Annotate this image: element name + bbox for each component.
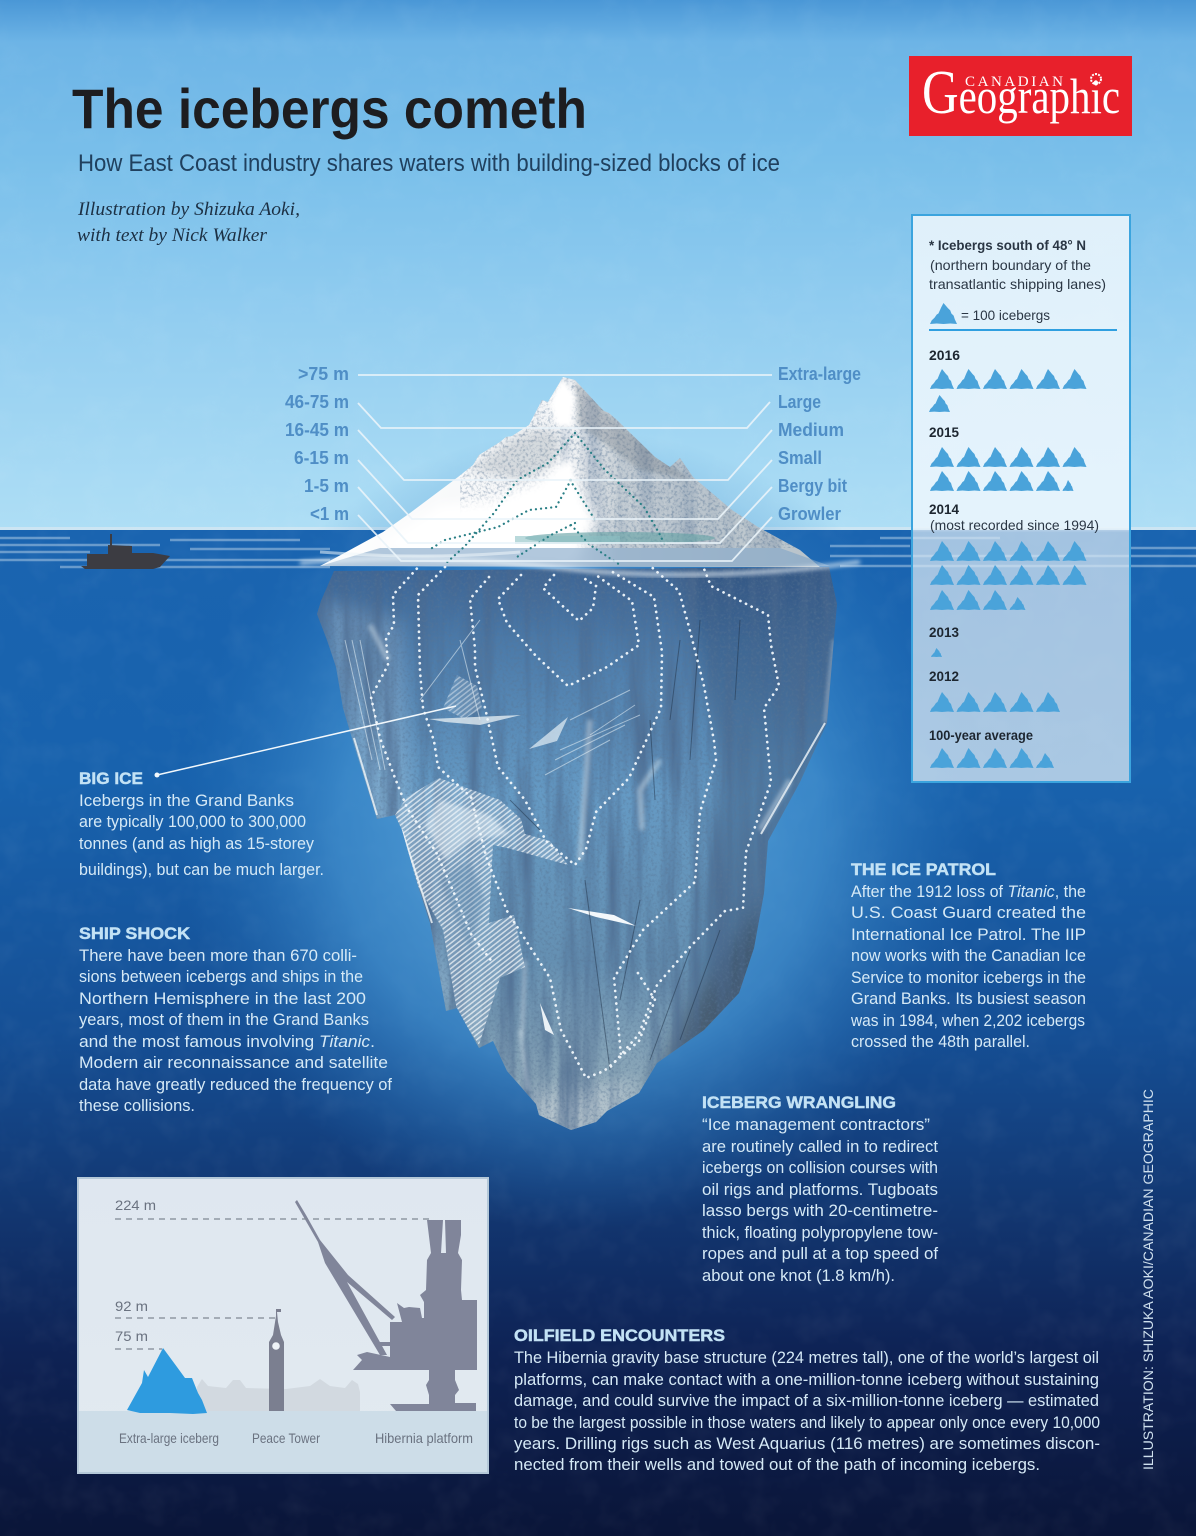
height labels: 224 m (115, 1197, 156, 1213)
panel heading: (northern boundary of the (930, 257, 1091, 273)
size labels: metres: <1 m (310, 504, 349, 524)
row: 2014 (929, 501, 1099, 610)
text: big ice: BIG ICE (79, 770, 143, 788)
text: big ice: tonnes (and as high as 15-storey (79, 835, 315, 853)
text: the ice patrol: Grand Banks. Its busiest season (851, 990, 1086, 1008)
iceberg: white dotted submerged contours (371, 564, 779, 1078)
text: oilfield encounters: OILFIELD ENCOUNTERS (514, 1327, 725, 1345)
iceberg: teal dotted contours above water (429, 433, 665, 565)
title: The icebergs cometh (72, 77, 587, 140)
panel: icebergs south of 48 N (912, 215, 1130, 782)
row: 2016 (929, 347, 1086, 412)
size labels: names: Large (778, 392, 821, 412)
glow around submerged iceberg (180, 430, 980, 1230)
waterline highlight (0, 527, 1196, 530)
text: iceberg wrangling: thick, floating polypropylene tow- (702, 1224, 938, 1242)
legend: icon equals 100 icebergs: = 100 icebergs (961, 307, 1050, 323)
size labels: metres (285, 364, 349, 524)
background: sky (0, 0, 1196, 530)
text: iceberg wrangling: lasso bergs with 20-centimetre- (702, 1202, 938, 1220)
size labels: names (778, 364, 861, 524)
panel: height comparison chart (78, 1178, 488, 1473)
row: 2016: 2016 (929, 347, 960, 363)
text: iceberg wrangling: oil rigs and platforms. Tugboats (702, 1181, 938, 1199)
text: big ice (79, 770, 324, 879)
byline: Illustration by Shizuka Aoki, (77, 199, 300, 220)
size labels: metres: 46-75 m (285, 392, 349, 412)
size category lines (358, 375, 772, 561)
text: ship shock: There have been more than 670 colli- (79, 947, 357, 965)
iceberg: above-water peak (300, 377, 860, 575)
size labels: metres: 1-5 m (304, 476, 349, 496)
text: ship shock: SHIP SHOCK (79, 925, 190, 943)
text: ship shock: these collisions. (79, 1097, 195, 1115)
text: the ice patrol: now works with the Canadian Ice (851, 947, 1086, 965)
row: 2015 (929, 424, 1086, 491)
height labels (115, 1197, 156, 1344)
surface foam streaks (0, 538, 1196, 567)
text: big ice: are typically 100,000 to 300,000 (79, 813, 306, 831)
byline (77, 199, 300, 246)
object labels: Hibernia platform (375, 1430, 473, 1446)
text: the ice patrol: THE ICE PATROL (851, 861, 996, 879)
waterline band (79, 1411, 487, 1472)
text: ship shock: and the most famous involving Titanic. (79, 1033, 375, 1051)
row: 2012: 2012 (929, 668, 959, 684)
row: 100-year average: 100-year average (929, 727, 1033, 743)
dashed height lines (115, 1219, 432, 1349)
text: ship shock: sions between icebergs and ships in the (79, 968, 363, 986)
text: iceberg wrangling: are routinely called in to redirect (702, 1138, 938, 1156)
iceberg (300, 377, 860, 1135)
text: the ice patrol: Service to monitor icebergs in the (851, 969, 1086, 987)
text: big ice: Icebergs in the Grand Banks (79, 792, 294, 810)
panel heading (929, 237, 1106, 292)
object labels: Peace Tower (252, 1430, 320, 1446)
object labels (119, 1430, 473, 1446)
row: 2015: 2015 (929, 424, 959, 440)
text: ship shock (79, 925, 392, 1115)
legend: icon equals 100 icebergs (930, 303, 1050, 324)
byline: with text by Nick Walker (77, 225, 268, 246)
text: oilfield encounters: nected from their wells and towed out of the path of incoming icebergs. (514, 1456, 1040, 1474)
text: oilfield encounters: The Hibernia gravity base structure (224 metres tall), one of the world’s largest oil (514, 1349, 1099, 1367)
size labels: names: Extra-large (778, 364, 861, 384)
height labels: 75 m (115, 1328, 148, 1344)
panel heading: transatlantic shipping lanes) (929, 276, 1106, 292)
iceberg silhouette (127, 1348, 207, 1414)
text: big ice: buildings), but can be much larger. (79, 861, 324, 879)
row: 2014: 2014 (929, 501, 959, 517)
text: ship shock: years, most of them in the Grand Banks (79, 1011, 369, 1029)
logo: Canadian Geographic: CANADIAN (965, 74, 1063, 90)
Peace Tower silhouette (269, 1309, 284, 1411)
subtitle: How East Coast industry shares waters with building-sized blocks of ice (78, 150, 780, 177)
text: iceberg wrangling: ICEBERG WRANGLING (702, 1094, 896, 1112)
text: the ice patrol: crossed the 48th parallel. (851, 1033, 1030, 1051)
background: sea (0, 530, 1196, 1536)
iceberg: white hatched faces (345, 620, 834, 1090)
row: 2012 (929, 668, 1060, 712)
text: oilfield encounters: damage, and could survive the impact of a six-million-tonne iceberg — estimated (514, 1392, 1099, 1410)
callout leader: big ice (154, 706, 456, 778)
vertical credit: ILLUSTRATION: SHIZUKA AOKI/CANADIAN GEOGRAPHIC (1140, 1089, 1156, 1470)
text: ship shock: data have greatly reduced the frequency of (79, 1076, 392, 1094)
text: the ice patrol: was in 1984, when 2,202 icebergs (850, 1012, 1085, 1030)
text: iceberg wrangling (702, 1094, 938, 1285)
text: ship shock: Modern air reconnaissance and satellite (79, 1054, 388, 1072)
size labels: names: Small (778, 448, 822, 468)
text: oilfield encounters (514, 1327, 1100, 1474)
object labels: Extra-large iceberg (119, 1430, 219, 1446)
reference: Parliament building (197, 1379, 360, 1411)
text: iceberg wrangling: icebergs on collision courses with (702, 1159, 938, 1177)
text: oilfield encounters: years. Drilling rigs such as West Aquarius (116 metres) are sometimes discon- (514, 1435, 1100, 1453)
size labels: metres: >75 m (298, 364, 349, 384)
ship (81, 534, 170, 569)
size labels: names: Growler (778, 504, 841, 524)
row: 100-year average (929, 727, 1054, 768)
row: 2013: 2013 (929, 624, 959, 640)
iceberg: submerged mass (310, 560, 840, 1135)
size labels: names: Medium (778, 420, 844, 440)
text: oilfield encounters: platforms, can make contact with a one-million-tonne iceberg without sustaining (514, 1371, 1099, 1389)
text: the ice patrol: After the 1912 loss of Titanic, the (851, 883, 1086, 901)
text: iceberg wrangling: about one knot (1.8 km/h). (702, 1267, 895, 1285)
logo: Canadian Geographic: Geographic (922, 59, 1120, 127)
height labels: 92 m (115, 1298, 148, 1314)
panel heading: * Icebergs south of 48° N (929, 237, 1086, 253)
Hibernia platform silhouette (295, 1200, 477, 1411)
text: iceberg wrangling: ropes and pull at a top speed of (702, 1245, 938, 1263)
text: iceberg wrangling: “Ice management contractors” (702, 1116, 930, 1134)
text: ship shock: Northern Hemisphere in the last 200 (79, 990, 366, 1008)
text: the ice patrol: International Ice Patrol. The IIP (851, 926, 1086, 944)
text: oilfield encounters: to be the largest possible in those waters and likely to appear only once every 10,000 (514, 1414, 1100, 1432)
size labels: metres: 6-15 m (294, 448, 349, 468)
text: the ice patrol (850, 861, 1086, 1051)
text: the ice patrol: U.S. Coast Guard created the (851, 904, 1086, 922)
row: 2013 (929, 624, 959, 657)
size labels: metres: 16-45 m (285, 420, 349, 440)
row: 2014: (most recorded since 1994) (930, 517, 1099, 533)
size labels: names: Bergy bit (778, 476, 847, 496)
